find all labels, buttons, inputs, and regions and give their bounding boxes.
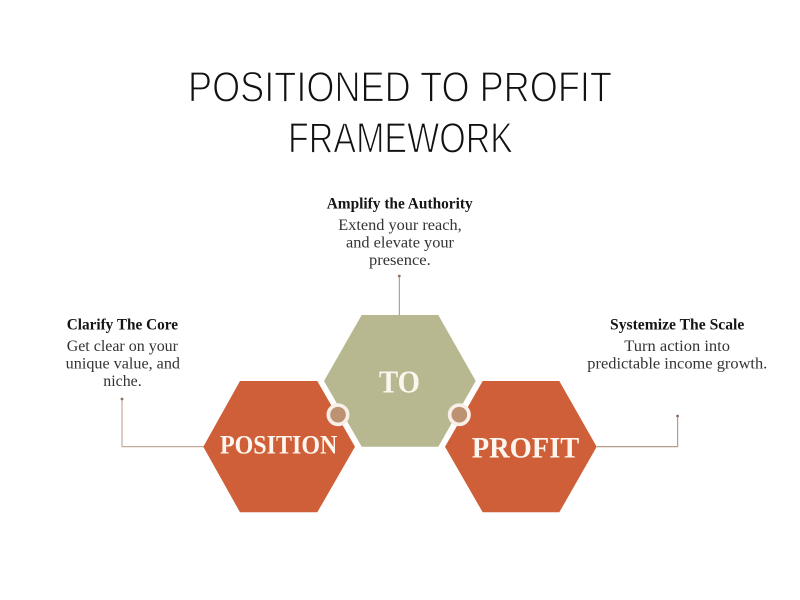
text block: clarify the core: unique value, and	[66, 355, 180, 372]
node: left	[326, 403, 350, 426]
title: FRAMEWORK	[288, 115, 513, 163]
text block: clarify the core: niche.	[103, 373, 142, 390]
hexagon: to: TO	[379, 363, 420, 399]
hexagon: position	[203, 381, 355, 512]
title	[188, 64, 612, 163]
text block: amplify the authority	[327, 196, 473, 269]
text block: systemize the scale: Turn action into	[624, 338, 730, 355]
text block: systemize the scale: predictable income growth.	[587, 356, 767, 373]
title: POSITIONED TO PROFIT	[188, 64, 612, 112]
hexagon: to	[324, 315, 476, 447]
text block: amplify the authority: Amplify the Authority	[327, 196, 473, 213]
hexagon: profit: PROFIT	[472, 431, 579, 464]
text block: clarify the core	[66, 317, 180, 390]
text block: amplify the authority: Extend your reach,	[338, 217, 462, 234]
hexagon: position: POSITION	[220, 429, 337, 459]
node: right	[448, 403, 471, 426]
connector: right	[597, 415, 679, 447]
text block: clarify the core: Clarify The Core	[67, 317, 178, 334]
text block: amplify the authority: presence.	[369, 252, 431, 269]
connector: left	[121, 398, 204, 447]
text block: systemize the scale: Systemize The Scale	[610, 317, 744, 334]
hexagon: profit	[445, 381, 597, 512]
text block: systemize the scale	[587, 317, 767, 373]
connector: top	[398, 275, 401, 315]
text block: clarify the core: Get clear on your	[67, 338, 179, 355]
text block: amplify the authority: and elevate your	[346, 235, 455, 252]
